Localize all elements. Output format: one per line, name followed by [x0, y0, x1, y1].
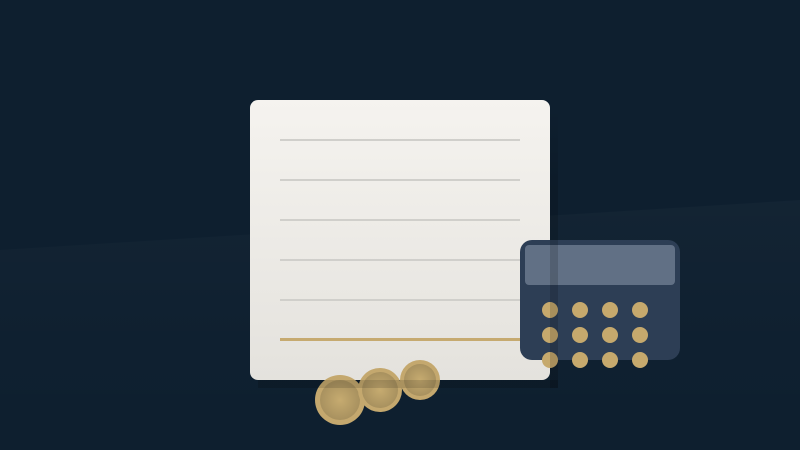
calculator keys	[542, 302, 648, 368]
calculator screen	[525, 245, 675, 285]
sheet shadow bottom band	[258, 380, 558, 388]
background wedge	[0, 200, 800, 450]
ledger sheet	[250, 100, 550, 380]
coins	[315, 360, 440, 425]
calculator	[520, 240, 680, 368]
coin large	[315, 375, 365, 425]
ledger total line	[280, 338, 520, 341]
sheet shadow right band	[550, 108, 558, 388]
ledger rows	[280, 139, 520, 301]
coin medium	[358, 368, 402, 412]
coin small	[400, 360, 440, 400]
